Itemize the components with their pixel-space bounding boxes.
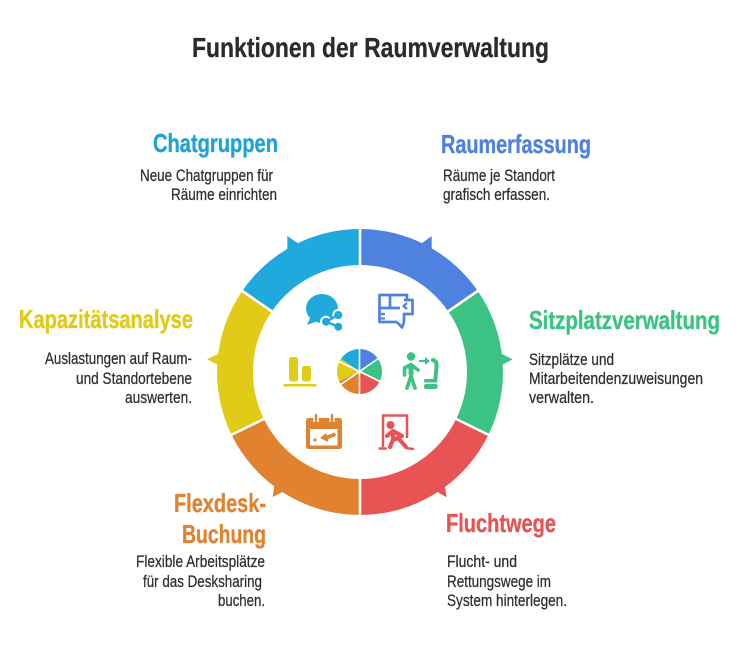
- text: Flexdesk-Buchung description: buchen.: [218, 592, 265, 610]
- text: Kapazitätsanalyse description: und Standortebene: [76, 370, 192, 388]
- ring segment: Flexdesk-Buchung: [232, 419, 360, 515]
- text: Chatgruppen description: [140, 167, 277, 204]
- panel: Flexdesk-Buchung: [136, 488, 266, 610]
- heading: Kapazitätsanalyse: Kapazitätsanalyse: [19, 304, 193, 334]
- text: Sitzplatzverwaltung description: Sitzplätze und: [529, 351, 614, 369]
- text: Fluchtwege description: Rettungswege im: [447, 573, 551, 591]
- text: Chatgruppen description: Neue Chatgruppen für: [140, 167, 273, 185]
- panel: Sitzplatzverwaltung: [529, 305, 720, 407]
- panel: Kapazitätsanalyse: [19, 304, 193, 407]
- ring segment: Fluchtwege: [360, 419, 488, 515]
- ring segment: Kapazitätsanalyse: [207, 291, 272, 435]
- ring diagram: [207, 224, 513, 520]
- icon: bar chart: [284, 357, 316, 386]
- icon: centre pie: [337, 348, 382, 395]
- heading: Raumerfassung: Raumerfassung: [441, 129, 591, 159]
- text: Raumerfassung description: Räume je Standort: [443, 167, 555, 185]
- text: Kapazitätsanalyse description: [45, 350, 192, 407]
- heading: Flexdesk-Buchung: Buchung: [182, 519, 266, 549]
- icon: emergency exit runner: [380, 416, 413, 449]
- text: Raumerfassung description: [443, 167, 555, 204]
- ring segment: Raumerfassung: [360, 229, 478, 311]
- text: Flexdesk-Buchung description: für das Desksharing: [143, 573, 262, 591]
- heading: Flexdesk-Buchung: Flexdesk-: [174, 488, 266, 518]
- icon: room floor plan: [380, 295, 412, 328]
- panel: Raumerfassung: [441, 129, 591, 204]
- title: Funktionen der Raumverwaltung: [192, 32, 549, 63]
- text: Fluchtwege description: [447, 553, 567, 610]
- heading: Flexdesk-Buchung: [174, 488, 266, 549]
- text: Kapazitätsanalyse description: Auslastungen auf Raum-: [45, 350, 192, 368]
- panel: Fluchtwege: [446, 508, 567, 610]
- ring segment: Sitzplatzverwaltung: [448, 291, 513, 435]
- panel: Chatgruppen: [140, 128, 278, 204]
- text: Flexdesk-Buchung description: [136, 553, 265, 610]
- text: Flexdesk-Buchung description: Flexible Arbeitsplätze: [136, 553, 265, 571]
- ring segment: Chatgruppen: [242, 229, 360, 311]
- icon: person moving to seat: [404, 352, 438, 389]
- text: Sitzplatzverwaltung description: Mitarbeitendenzuweisungen: [529, 370, 703, 388]
- icon: chat bubbles with share: [306, 294, 343, 332]
- text: Sitzplatzverwaltung description: [529, 351, 703, 407]
- text: Fluchtwege description: Flucht- und: [447, 553, 517, 571]
- heading: Fluchtwege: Fluchtwege: [446, 508, 556, 538]
- heading: Chatgruppen: Chatgruppen: [153, 128, 278, 158]
- text: Chatgruppen description: Räume einrichten: [171, 186, 277, 204]
- text: Raumerfassung description: grafisch erfassen.: [443, 186, 550, 204]
- text: Kapazitätsanalyse description: auswerten.: [125, 389, 192, 407]
- text: Sitzplatzverwaltung description: verwalten.: [529, 389, 594, 407]
- text: Fluchtwege description: System hinterlegen.: [447, 592, 567, 610]
- icon: calendar booking: [306, 415, 342, 449]
